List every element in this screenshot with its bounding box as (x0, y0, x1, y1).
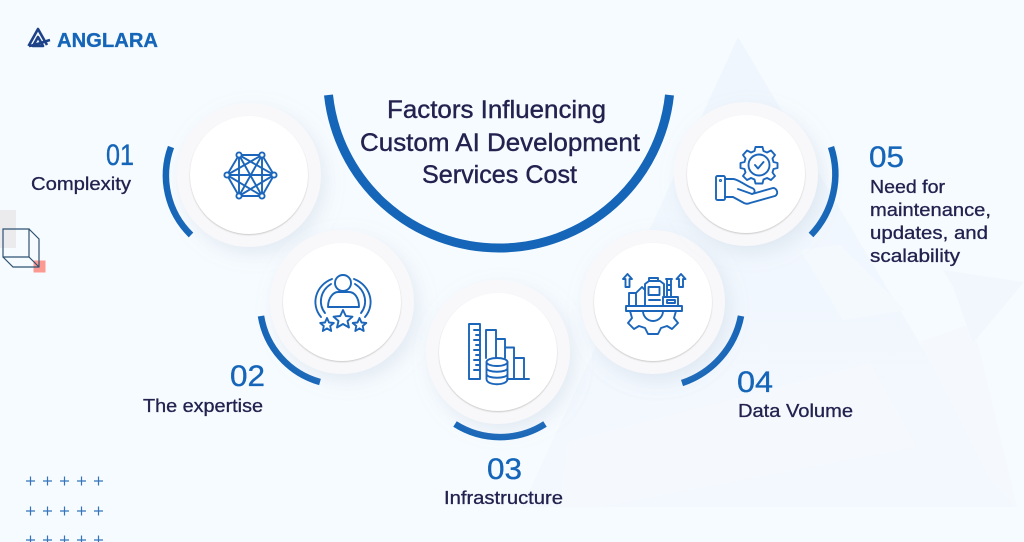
decorative cube (0, 210, 46, 272)
background triangle watermark (522, 37, 1024, 507)
label 05: updates, and (870, 223, 988, 243)
icon: hand with gear (716, 147, 778, 204)
label 04: 04 (737, 366, 773, 399)
label 03 (444, 453, 563, 508)
label 05: scalability (870, 246, 960, 266)
label 02: The expertise (143, 396, 263, 416)
label 01: Complexity (31, 174, 131, 194)
label 03: Infrastructure (444, 488, 563, 508)
icon: factory on gear (623, 274, 686, 334)
icon: network (224, 152, 277, 199)
factor 03: infrastructure (426, 280, 570, 508)
label 05: 05 (869, 141, 904, 174)
logo: Anglara: ANGLARA (57, 30, 158, 52)
factor 02: the expertise (143, 230, 414, 416)
label 02: 02 (230, 360, 265, 393)
label 05: Need for (870, 177, 945, 197)
factor 04: data volume (581, 230, 853, 421)
title (360, 96, 640, 189)
label 04: Data Volume (738, 401, 853, 421)
label 01: 01 (106, 139, 134, 172)
title: Services Cost (422, 161, 577, 189)
central arc (328, 95, 670, 248)
icon: chart with database (469, 324, 529, 384)
title: Custom AI Development (360, 129, 640, 157)
plus pattern (26, 476, 103, 542)
label 04 (737, 366, 853, 421)
factor 01: complexity (31, 103, 321, 247)
label 03: 03 (487, 453, 522, 486)
icon: person with stars (315, 275, 371, 331)
label 05: maintenance, (870, 200, 991, 220)
factor 05: maintenance (674, 102, 991, 266)
label 05 (869, 141, 991, 266)
title: Factors Influencing (387, 96, 606, 124)
label 01 (31, 139, 134, 194)
label 02 (143, 360, 265, 416)
